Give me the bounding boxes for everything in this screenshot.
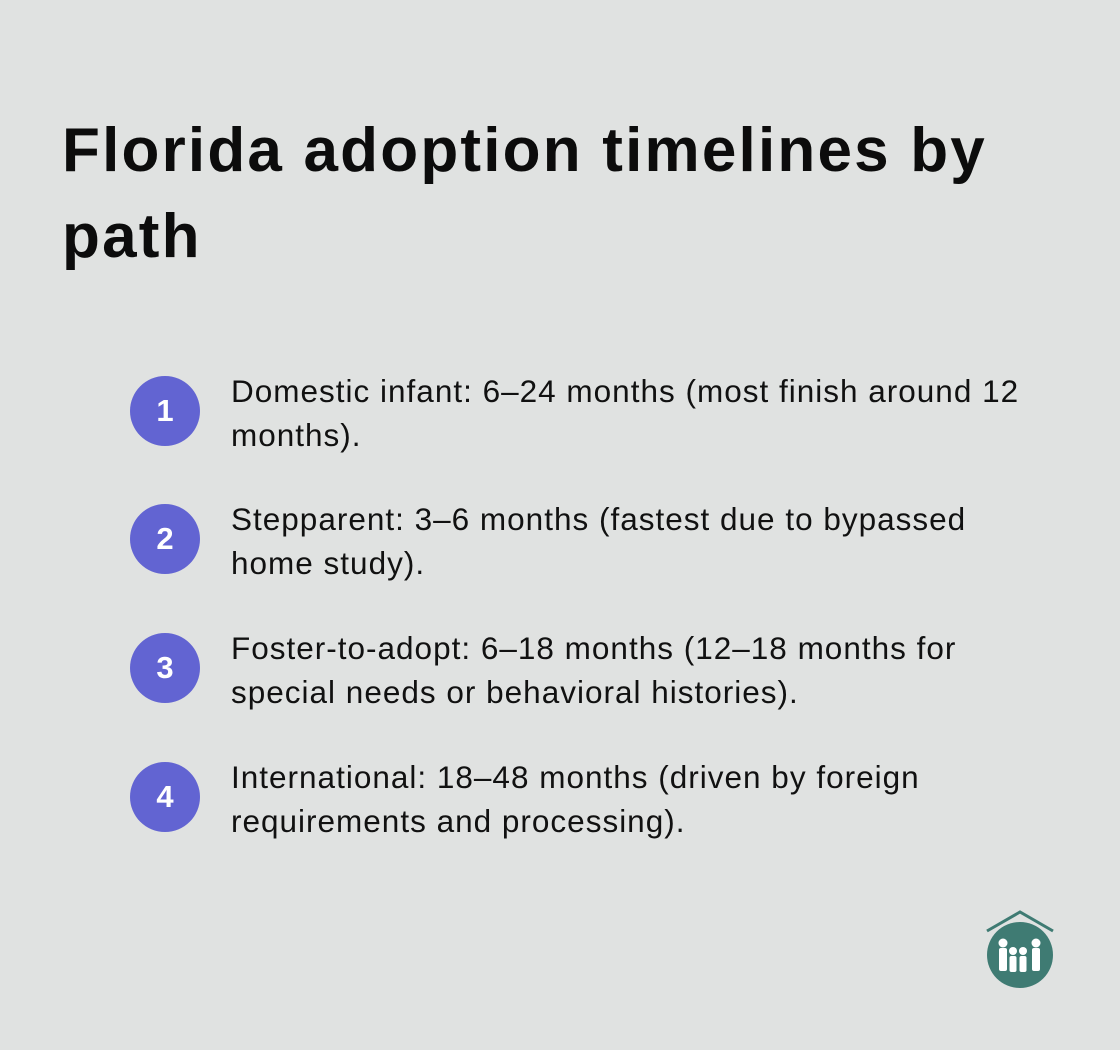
- text 1: [231, 373, 1019, 453]
- badge 3: 3: [156, 650, 174, 685]
- text 4: requirements and processing).: [231, 803, 685, 839]
- text 2: [231, 501, 966, 581]
- title: path: [62, 202, 202, 271]
- text 4: International: 18–48 months (driven by foreign: [231, 759, 920, 795]
- title: [62, 116, 987, 271]
- item 2: [130, 501, 966, 581]
- text 1: Domestic infant: 6–24 months (most finish around 12: [231, 373, 1019, 409]
- item 4: [130, 759, 920, 839]
- text 3: special needs or behavioral histories).: [231, 674, 799, 710]
- text 2: Stepparent: 3–6 months (fastest due to bypassed: [231, 501, 966, 537]
- title: Florida adoption timelines by: [62, 116, 987, 185]
- badge 1: 1: [156, 393, 174, 428]
- text 3: [231, 630, 956, 710]
- badge 3: [130, 633, 200, 703]
- badge 4: [130, 762, 200, 832]
- text 4: [231, 759, 920, 839]
- item 3: [130, 630, 956, 710]
- badge 2: [130, 504, 200, 574]
- text 1: months).: [231, 417, 362, 453]
- badge 2: 2: [156, 521, 174, 556]
- icon: family house logo: [986, 910, 1054, 988]
- item 1: [130, 373, 1019, 453]
- text 3: Foster-to-adopt: 6–18 months (12–18 months for: [231, 630, 956, 666]
- badge 4: 4: [156, 779, 174, 814]
- text 2: home study).: [231, 545, 425, 581]
- badge 1: [130, 376, 200, 446]
